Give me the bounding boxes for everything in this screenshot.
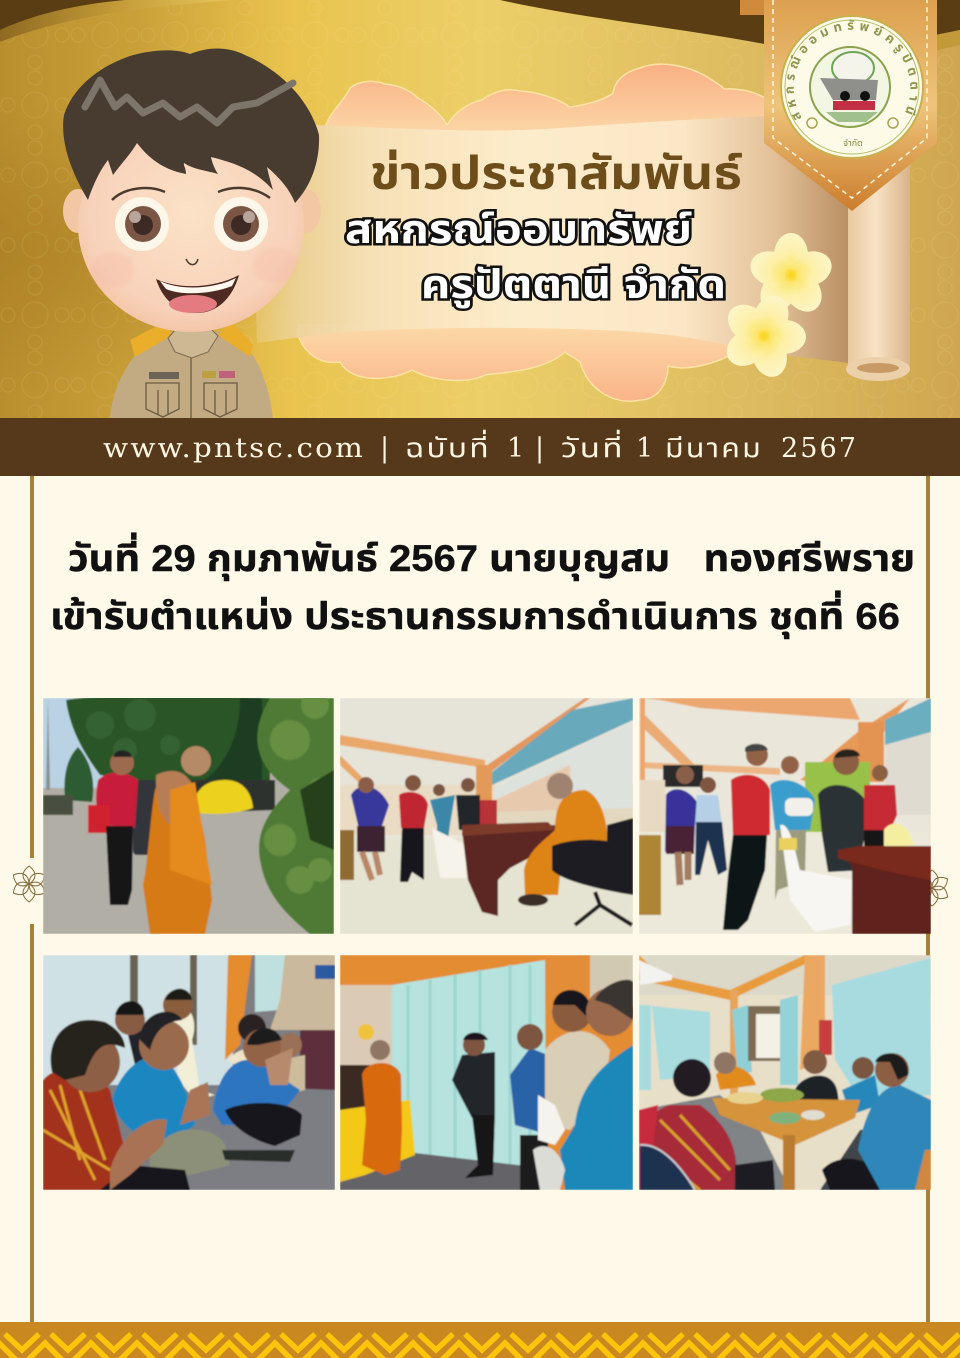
organisation name line 1: สหกรณ์ออมทรัพย์ [345, 208, 692, 252]
badge with logo [740, 0, 937, 211]
info band: ฉบับที่ [405, 429, 491, 464]
photo: group standing in office [639, 698, 931, 934]
info band [0, 418, 960, 476]
logo: cooperative seal: จำกัด [843, 138, 863, 148]
photo: meeting around table [639, 955, 931, 1190]
info band: | [380, 433, 391, 464]
epaulettes [130, 322, 253, 357]
nose [186, 259, 198, 265]
footer pattern strip [0, 1322, 960, 1358]
title heading: ข่าวประชาสัมพันธ์ [370, 147, 743, 199]
face [78, 118, 304, 332]
mouth [156, 275, 239, 313]
character: boy in uniform [63, 48, 321, 418]
info band: www.pntsc.com [103, 433, 365, 464]
info band: วันที่ [561, 429, 625, 464]
cloud: top peach [326, 64, 765, 135]
info band: 1 [636, 433, 655, 464]
pockets [146, 358, 237, 418]
cloud: bottom peach [298, 325, 745, 401]
photo: men seated praying [43, 955, 335, 1190]
scroll paper [250, 116, 848, 363]
hair highlight [85, 80, 293, 123]
photo: monk at desk [340, 698, 633, 934]
icon: left flower ornament [10, 866, 48, 902]
info band: มีนาคม [665, 433, 763, 464]
info band: 2567 [781, 433, 858, 464]
character body [110, 332, 273, 418]
eyebrows [112, 188, 270, 200]
photo: monk outdoors [43, 698, 334, 934]
left eye [115, 197, 169, 251]
info band: 1 [507, 433, 526, 464]
icon: right flower ornament [913, 870, 951, 906]
icon: frangipani flowers [720, 233, 836, 381]
news headline: วันที่ 29 กุมภาพันธ์ 2567 นายบุญสม ทองศรีพราย [68, 532, 915, 581]
ears [63, 189, 93, 233]
right eye [214, 197, 268, 251]
header banner [0, 0, 960, 418]
photo: monk at altar with curtains [340, 955, 633, 1190]
collar [168, 326, 218, 358]
organisation name line 2: ครูปัตตานี จำกัด [421, 263, 726, 309]
side border lines [32, 476, 928, 1322]
news headline: เข้ารับตำแหน่ง ประธานกรรมการดำเนินการ ชุดที่ 66 [50, 590, 900, 639]
cheeks [90, 247, 297, 288]
logo: cooperative seal: สหกรณ์ออมทรัพย์ครูปัตตานี [786, 19, 918, 120]
info band: | [535, 433, 546, 464]
scroll roller [846, 165, 910, 381]
news headline [50, 532, 915, 639]
hair [63, 48, 319, 203]
